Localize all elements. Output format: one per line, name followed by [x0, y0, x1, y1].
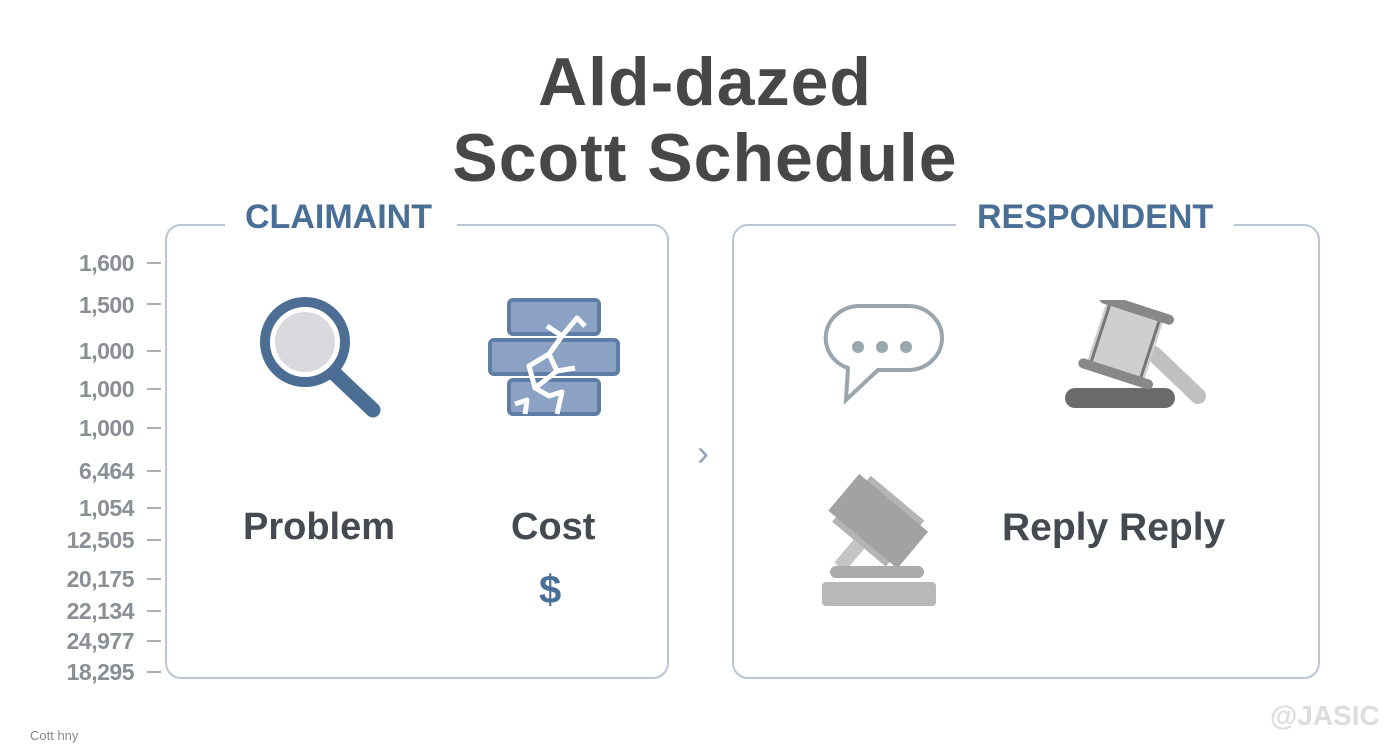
- y-axis labels: 1,000: [79, 338, 134, 364]
- panel: respondent: [732, 224, 1320, 679]
- y-axis labels: 1,054: [79, 495, 134, 521]
- y-axis labels: 20,175: [67, 566, 134, 592]
- y-axis labels: [67, 250, 161, 685]
- y-axis labels: 1,500: [79, 292, 134, 318]
- icon: speech bubble: [824, 304, 944, 405]
- y-axis labels: 24,977: [67, 628, 134, 654]
- icon: gavel 1: [1065, 300, 1206, 408]
- y-axis labels: 6,464: [79, 458, 134, 484]
- heading: claimant: CLAIMAINT: [245, 198, 432, 236]
- arrow: chevron: ›: [697, 432, 709, 473]
- y-axis labels: 1,600: [79, 250, 134, 276]
- icon: cracked bricks: [488, 298, 620, 416]
- y-axis labels: 12,505: [67, 527, 134, 553]
- watermark: @JASIC: [1270, 700, 1380, 731]
- icon: gavel 2: [822, 474, 936, 606]
- panel: claimant: [165, 224, 669, 679]
- title: Ald-dazed: [538, 44, 872, 120]
- title: [452, 44, 958, 196]
- y-axis labels: 1,000: [79, 415, 134, 441]
- label: reply reply: Reply Reply: [1002, 506, 1225, 549]
- label: problem: Problem: [243, 506, 395, 548]
- title: Scott Schedule: [452, 120, 958, 196]
- y-axis labels: 22,134: [67, 598, 134, 624]
- y-axis labels: 1,000: [79, 376, 134, 402]
- heading: respondent: RESPONDENT: [977, 198, 1213, 236]
- label: cost: Cost: [511, 506, 595, 548]
- footer text: Cott hny: [30, 728, 78, 743]
- icon: magnifier: [260, 297, 380, 418]
- y-axis labels: 18,295: [67, 659, 134, 685]
- icon: dollar: $: [539, 568, 561, 612]
